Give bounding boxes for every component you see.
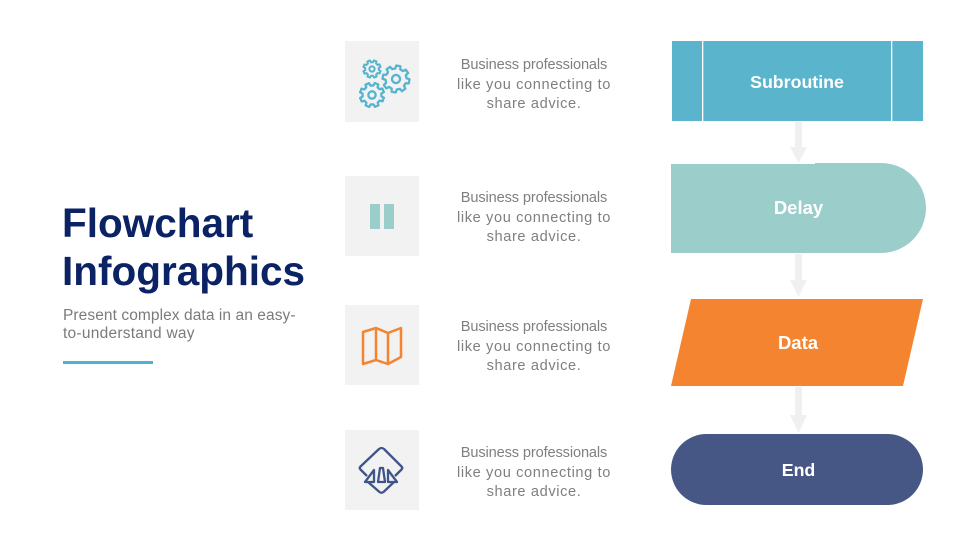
- large gear: [381, 64, 411, 94]
- subtitle: [63, 307, 296, 342]
- text block: row 4: [457, 445, 611, 500]
- text block: row 3: Business professionals: [461, 319, 607, 335]
- subtitle: to-understand way: [63, 324, 195, 342]
- text block: row 3: [457, 319, 611, 374]
- icon tile: diamond sign: [345, 430, 419, 510]
- accent underline: [63, 361, 153, 364]
- text block: row 2: [457, 190, 611, 245]
- text block: row 1: share advice.: [487, 96, 581, 112]
- text block: row 3: share advice.: [487, 358, 581, 374]
- shape: subroutine: Subroutine: [750, 72, 844, 92]
- icon tile: pause: [345, 176, 419, 256]
- subtitle: Present complex data in an easy-: [63, 307, 296, 324]
- shape: data: Data: [778, 332, 819, 353]
- shape: delay: [671, 163, 926, 253]
- arrow: data to end: [790, 387, 807, 433]
- shape: delay: Delay: [774, 197, 824, 218]
- arrow: delay to data: [790, 254, 807, 297]
- text block: row 1: Business professionals: [461, 57, 607, 73]
- text block: row 4: like you connecting to: [457, 464, 611, 480]
- text block: row 1: like you connecting to: [457, 76, 611, 92]
- title: Flowchart: [62, 200, 253, 246]
- shape: subroutine: [672, 41, 923, 121]
- icon tile: map: [345, 305, 419, 385]
- text block: row 1: [457, 57, 611, 112]
- text block: row 2: like you connecting to: [457, 210, 611, 226]
- heading block: [62, 200, 305, 364]
- text block: row 2: share advice.: [487, 229, 581, 245]
- text block: row 4: Business professionals: [461, 445, 607, 461]
- arrow: subroutine to delay: [790, 122, 807, 163]
- icon tile: gears: [345, 41, 419, 122]
- shape: data: [671, 299, 923, 386]
- medium gear: [356, 79, 388, 111]
- shape: end: End: [782, 460, 815, 480]
- text block: row 2: Business professionals: [461, 190, 607, 206]
- title: [62, 200, 305, 294]
- text block: row 3: like you connecting to: [457, 338, 611, 354]
- shape: end: [671, 434, 923, 505]
- title: Infographics: [62, 248, 305, 294]
- text block: row 4: share advice.: [487, 484, 581, 500]
- small gear: [361, 58, 383, 80]
